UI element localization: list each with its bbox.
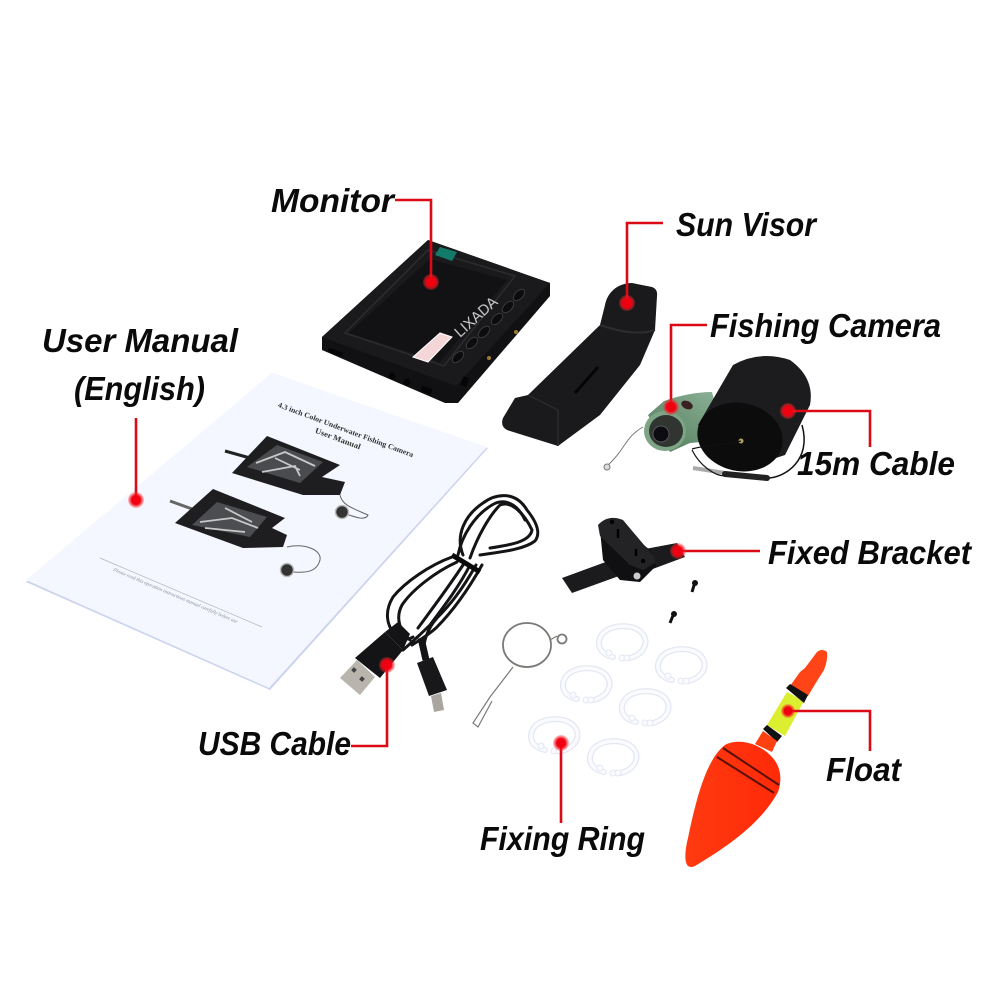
label: fishing camera: Fishing Camera xyxy=(710,307,941,344)
label: float: Float xyxy=(826,751,903,788)
label: fishing camera xyxy=(663,307,941,415)
wire loop with ring xyxy=(473,623,566,727)
fixing rings xyxy=(531,626,705,776)
label: fixing ring: Fixing Ring xyxy=(480,820,645,857)
manual footer note: Please read this operation instructions manual carefully before use xyxy=(111,568,239,625)
cable spool xyxy=(691,356,811,479)
brand logo: LIXADA xyxy=(451,294,501,341)
screws xyxy=(670,582,695,623)
label: usb cable xyxy=(198,657,395,762)
usb cable xyxy=(340,496,538,712)
manual subtitle text: User Manual xyxy=(314,426,363,452)
manual picture: lower monitor xyxy=(170,489,320,576)
monitor ports xyxy=(328,330,518,395)
label: fixing ring xyxy=(480,735,645,857)
camera probe wire xyxy=(607,427,643,466)
float xyxy=(685,650,827,867)
audio plug xyxy=(693,468,725,473)
sun visor xyxy=(502,283,657,446)
monitor screen xyxy=(349,259,507,362)
camera lens xyxy=(644,411,686,451)
green protective film tab xyxy=(435,247,457,261)
manual title text: 4.3 inch Color Underwater Fishing Camera xyxy=(277,400,415,459)
monitor device xyxy=(322,240,550,403)
pink warning sticker xyxy=(413,333,452,362)
label: monitor xyxy=(271,182,439,290)
label: 15m cable: 15m Cable xyxy=(797,445,955,482)
usb-a plug xyxy=(355,632,403,678)
mini-usb plug xyxy=(421,638,426,660)
label: user manual xyxy=(42,322,239,508)
monitor buttons xyxy=(450,287,527,365)
fishing camera xyxy=(604,392,725,470)
label: fixed bracket xyxy=(670,534,973,571)
label: sun visor xyxy=(619,206,818,311)
manual picture: upper monitor xyxy=(225,436,368,518)
cable tie xyxy=(452,555,480,572)
label: monitor: Monitor xyxy=(271,182,396,219)
label: user manual: User Manual xyxy=(42,322,239,359)
label: sun visor: Sun Visor xyxy=(676,206,818,243)
user manual booklet xyxy=(26,373,488,690)
label: fixed bracket: Fixed Bracket xyxy=(768,534,973,571)
label: float xyxy=(781,704,903,788)
label: user manual: (English) xyxy=(74,370,205,407)
fixed bracket xyxy=(562,518,698,623)
label: 15m cable xyxy=(780,403,955,482)
label: usb cable: USB Cable xyxy=(198,725,351,762)
